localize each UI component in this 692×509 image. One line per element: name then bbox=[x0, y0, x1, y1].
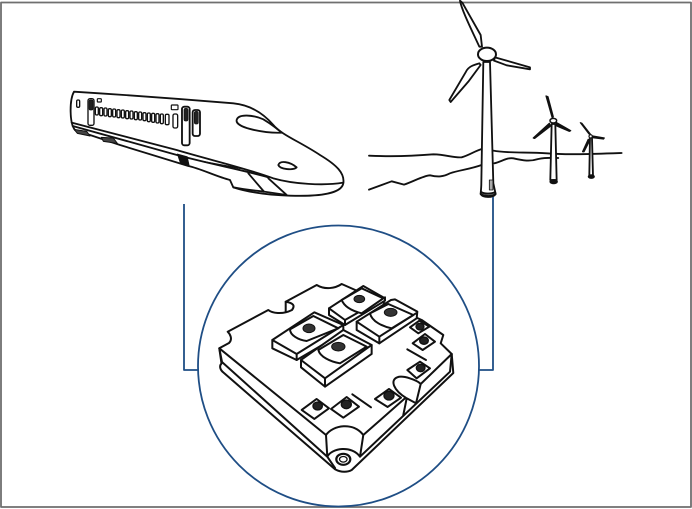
signal terminals: front bbox=[302, 389, 401, 419]
corner notch bbox=[393, 354, 452, 415]
small turbine bbox=[580, 123, 604, 178]
water lines bbox=[369, 149, 622, 190]
terminal block: right bbox=[357, 299, 417, 343]
circle callout bbox=[198, 226, 479, 506]
module base outline bbox=[219, 284, 453, 472]
terminal block: top bbox=[329, 286, 385, 325]
icon: power semiconductor module bbox=[219, 284, 453, 472]
large turbine bbox=[449, 1, 530, 197]
module surface edges bbox=[219, 302, 452, 468]
train windows bbox=[95, 107, 178, 128]
signal terminals: right bbox=[407, 321, 435, 378]
medium turbine bbox=[533, 96, 571, 183]
terminal block: left bbox=[272, 312, 343, 360]
mounting hole bbox=[336, 454, 350, 465]
icon: bullet train bbox=[71, 92, 344, 196]
terminal block: front bbox=[301, 330, 372, 387]
connector: train to module bbox=[184, 204, 202, 370]
connector: turbine to module bbox=[477, 197, 493, 370]
icon: wind turbines bbox=[369, 1, 622, 197]
